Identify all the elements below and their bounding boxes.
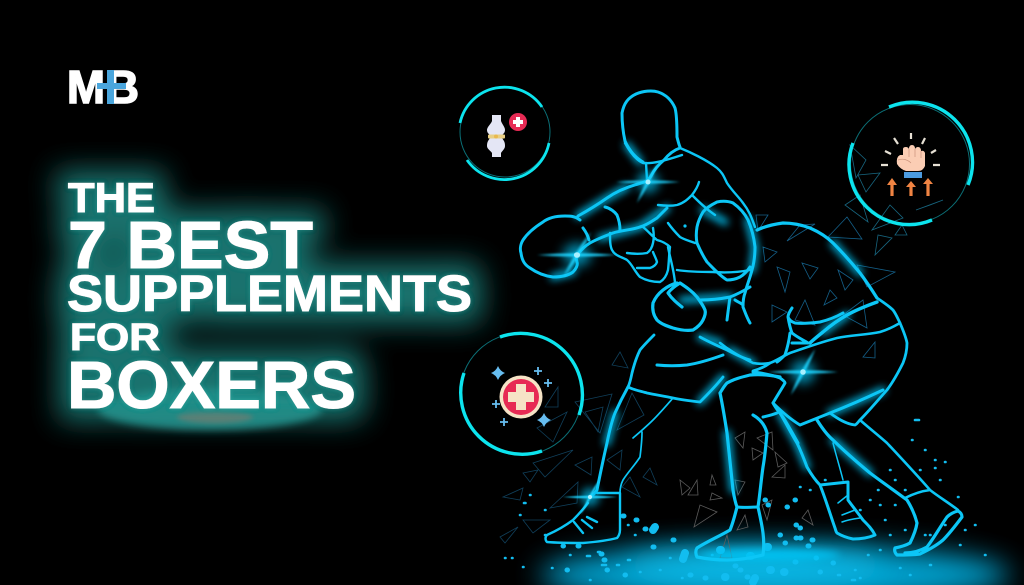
shorts (830, 298, 907, 425)
icon: sparkles (491, 366, 552, 427)
icon: knee joint (487, 115, 505, 157)
logo: B (106, 61, 139, 113)
icon: red cross badge (509, 113, 527, 131)
raised glove (696, 201, 755, 323)
joint icon ring (460, 87, 550, 180)
soft glow on figures (553, 145, 883, 561)
leg (590, 387, 628, 497)
particle shards (505, 420, 986, 582)
rear leg and boot (780, 413, 875, 539)
health icon ring (460, 333, 582, 455)
lower glove (653, 283, 705, 330)
icon: medical cross (500, 376, 542, 418)
nipple (683, 224, 687, 228)
torso and chest (625, 143, 755, 283)
lead arm and glove (520, 148, 680, 277)
figure: front boxer (520, 91, 755, 543)
back (757, 223, 877, 298)
title: BOXERS (67, 348, 356, 423)
figure: rear boxer (653, 201, 962, 560)
title (67, 174, 472, 423)
icon: raised fist (881, 133, 940, 196)
title: SUPPLEMENTS (67, 265, 472, 322)
guard arm (610, 227, 670, 282)
shorts (628, 335, 723, 402)
strength icon ring (849, 102, 972, 225)
title glow accent (98, 388, 322, 430)
front leg (696, 375, 780, 560)
title: 7 BEST (68, 208, 313, 283)
far leg and foot (817, 420, 962, 555)
particle triangles (500, 145, 943, 558)
title: THE (68, 174, 155, 221)
sparkle flares (537, 160, 838, 516)
logo (67, 61, 139, 113)
head (622, 91, 680, 162)
ground glow (540, 545, 1010, 585)
title: FOR (70, 317, 160, 359)
logo: M (67, 61, 105, 113)
boot (546, 493, 620, 543)
